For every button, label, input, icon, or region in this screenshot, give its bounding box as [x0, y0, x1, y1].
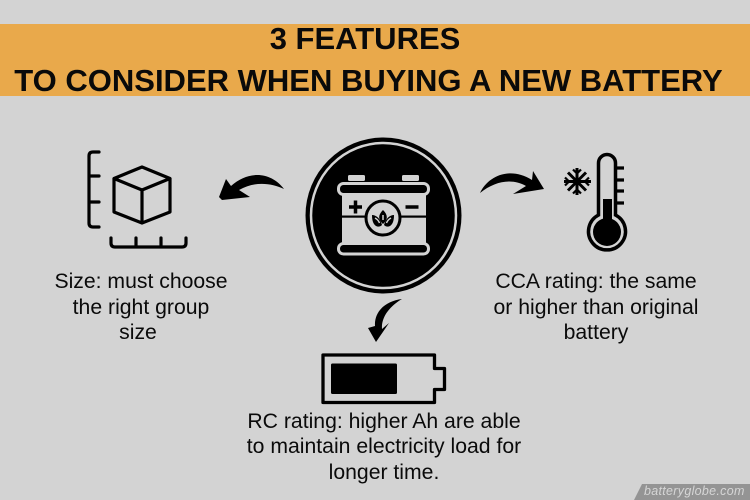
text: size: the right group	[73, 296, 209, 318]
arrow: to size	[219, 175, 284, 200]
text: size: size	[119, 321, 157, 344]
arrow: to RC	[368, 299, 402, 342]
watermark: batteryglobe.com	[644, 484, 745, 498]
text: RC rating: to maintain electricity load for	[247, 435, 521, 458]
text: RC rating: longer time.	[329, 460, 439, 484]
icon: cube with rulers	[89, 152, 186, 247]
icon: thermometer	[589, 154, 626, 250]
text: CCA rating: CCA rating: the same	[495, 270, 697, 293]
text: CCA rating	[494, 270, 698, 344]
icon: car battery in circle	[306, 138, 462, 294]
title line 2: TO CONSIDER WHEN BUYING A NEW BATTERY	[14, 63, 723, 98]
text: CCA rating: or higher than original	[494, 296, 698, 318]
text: RC rating: RC rating: higher Ah are able	[247, 410, 521, 432]
arrow: to CCA	[480, 171, 544, 194]
text: CCA rating: battery	[564, 321, 628, 344]
title banner	[0, 24, 750, 96]
watermark background	[634, 484, 750, 500]
text: size: Size: must choose	[54, 270, 228, 293]
icon: snowflake	[564, 168, 591, 195]
text: RC rating	[247, 410, 521, 484]
text: size	[54, 270, 228, 344]
icon: battery level	[323, 355, 444, 402]
title line 1: 3 FEATURES	[270, 21, 460, 56]
